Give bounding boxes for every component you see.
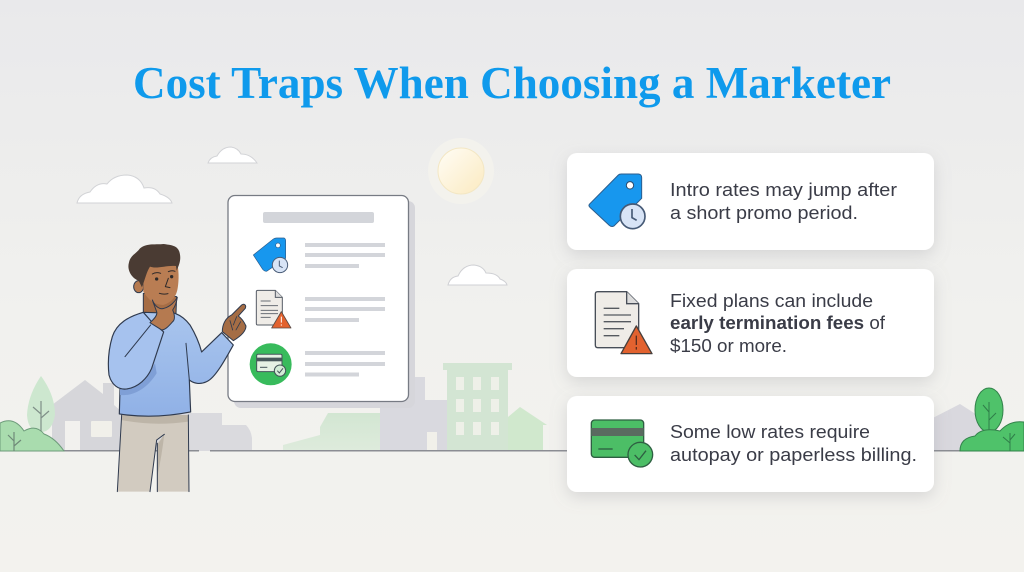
grey tower bbox=[380, 377, 447, 451]
card text bbox=[670, 179, 897, 223]
left tree bbox=[27, 376, 55, 432]
credit card check icon bbox=[591, 420, 653, 467]
hair bbox=[128, 244, 180, 287]
pointing hand bbox=[222, 304, 246, 341]
panel text placeholder lines bbox=[305, 243, 385, 376]
card: termination fees bbox=[567, 269, 934, 377]
panel card check icon bbox=[250, 343, 292, 385]
background skyline bbox=[52, 363, 985, 451]
document warning icon bbox=[595, 292, 652, 354]
hand on chin bbox=[150, 297, 177, 330]
pale green building bbox=[283, 413, 380, 451]
cloud large bbox=[77, 175, 172, 203]
panel document warning icon bbox=[256, 290, 291, 328]
grey low buildings bbox=[120, 413, 252, 451]
title: Cost Traps When Choosing a Marketer bbox=[133, 58, 891, 108]
left house bbox=[52, 380, 122, 451]
sleeve crease bbox=[125, 325, 189, 380]
panel header bar bbox=[263, 212, 374, 223]
neck bbox=[143, 293, 177, 320]
tag clock icon bbox=[589, 174, 645, 229]
card text: a short promo period. bbox=[670, 202, 858, 223]
person thinking and pointing bbox=[108, 244, 246, 492]
green apartment block bbox=[443, 363, 512, 451]
trousers bbox=[117, 415, 189, 492]
left bush bbox=[0, 421, 64, 451]
card text: Some low rates require bbox=[670, 421, 870, 442]
card text: Intro rates may jump after bbox=[670, 179, 897, 200]
panel tag icon bbox=[253, 238, 288, 273]
checklist document panel bbox=[228, 196, 415, 408]
card text bbox=[670, 290, 886, 356]
card text bbox=[670, 421, 917, 465]
hand finger lines bbox=[230, 317, 241, 330]
pale green right house bbox=[508, 407, 547, 451]
card: intro rates bbox=[567, 153, 934, 250]
facial features bbox=[152, 271, 175, 294]
face bbox=[143, 263, 179, 305]
cloud top bbox=[208, 147, 257, 163]
right house bbox=[925, 404, 985, 451]
right tree bbox=[975, 388, 1003, 432]
sleeve bbox=[108, 312, 164, 389]
right bush bbox=[960, 422, 1024, 451]
card text: Fixed plans can include bbox=[670, 290, 873, 311]
sweater body bbox=[119, 312, 233, 416]
sleeve shadow bbox=[120, 363, 157, 395]
card: autopay bbox=[567, 396, 934, 492]
ear bbox=[134, 281, 144, 293]
ground line bbox=[0, 450, 1024, 452]
card text: $150 or more. bbox=[670, 335, 787, 356]
card text: early termination fees of bbox=[670, 312, 886, 333]
sun bbox=[428, 138, 494, 204]
cloud right bbox=[448, 265, 507, 285]
card text: autopay or paperless billing. bbox=[670, 444, 917, 465]
